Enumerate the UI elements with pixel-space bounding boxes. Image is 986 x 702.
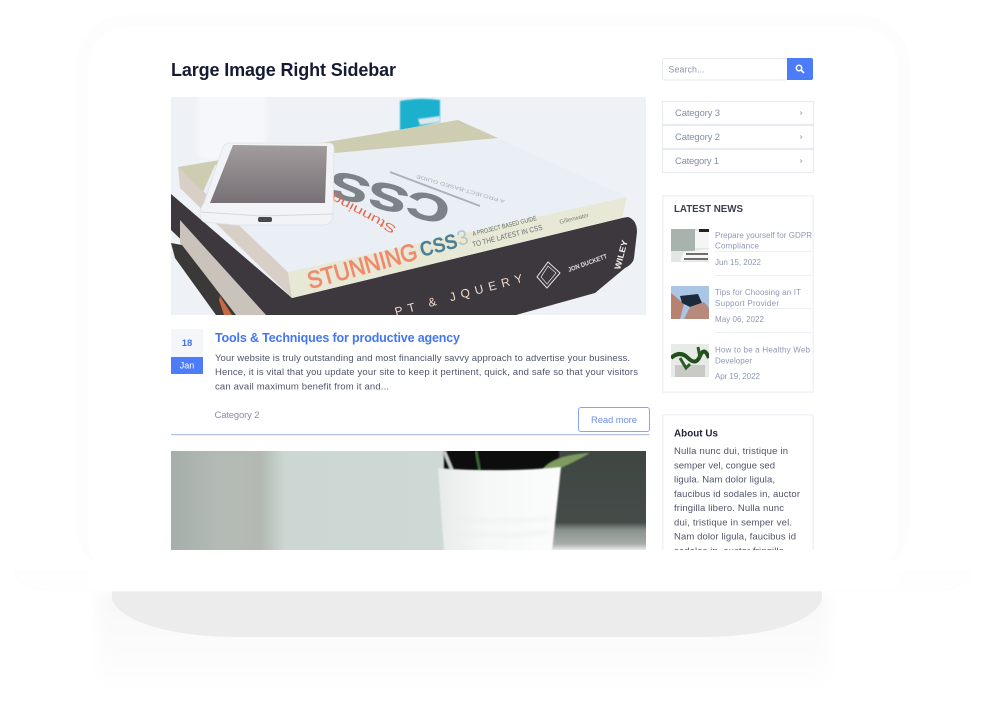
about text: Nam dolor ligula, faucibus id (674, 532, 796, 542)
cover lettering: CSS (326, 163, 454, 233)
hero photo: books and phone: TO THE LATEST IN CSS (471, 223, 543, 249)
search button (787, 58, 813, 80)
post meta: date badge: Jan (180, 360, 194, 370)
laptop frame (15, 15, 971, 591)
read more button: Read more (591, 415, 637, 426)
page title: Large Image Right Sidebar (171, 60, 396, 80)
dark book lettering: PT & JQUERY (393, 271, 524, 319)
panel: about us (662, 414, 814, 550)
news item 1: Prepare yourself for GDPR (715, 231, 812, 240)
hero photo: books and phone: A PROJECT BASED GUIDE (472, 215, 538, 238)
search box: Search... (668, 64, 704, 74)
news item 2: Tips for Choosing an IT (715, 288, 801, 297)
hero photo: books and phone: A PROJECT-BASED GUIDE (416, 173, 505, 203)
about text: dui, tristique in semper vel. (674, 518, 792, 528)
news item 3: How to be a Healthy Web (715, 346, 811, 354)
about text: faucibus id sodales in, auctor (674, 489, 800, 500)
second post photo: plant pot (171, 449, 646, 552)
post excerpt: can avail maximum benefit from it and... (215, 382, 389, 392)
news item 1 (671, 229, 813, 267)
hero photo: books and phone: 3 (454, 226, 471, 251)
post heading: Tools & Techniques for productive agency (215, 331, 460, 345)
about text (674, 446, 800, 557)
category list: Category 2 (675, 132, 720, 143)
news item 1: Jun 15, 2022 (715, 258, 762, 267)
read more button (578, 408, 650, 432)
post excerpt: Hence, it is vital that you update your site to keep it pertinent, quick, and safe so that your visitors (215, 367, 638, 378)
about text: semper vel, congue sed (674, 460, 775, 472)
post meta: date badge (171, 329, 203, 374)
post meta: date badge: 18 (182, 338, 192, 349)
post excerpt (215, 353, 638, 392)
panel: latest news: LATEST NEWS (674, 204, 743, 215)
panel: about us: About Us (674, 428, 719, 440)
post excerpt: Your website is truly outstanding and most financially savvy approach to advertise your business. (215, 353, 630, 364)
search box (662, 58, 813, 80)
about text: ligula. Nam dolor ligula, (674, 474, 775, 486)
upper book (178, 167, 292, 298)
lower dark book (171, 194, 637, 320)
news item 3 (671, 344, 811, 381)
panel: latest news (663, 196, 813, 392)
about text: fringilla libero. Nulla nunc (674, 503, 784, 514)
hero photo: books and phone: JON DUCKETT (567, 253, 608, 274)
about text: Nulla nunc dui, tristique in (674, 446, 788, 457)
hero photo: books and phone: WILEY (612, 239, 630, 271)
post category: Category 2 (214, 410, 260, 421)
news item 2: Support Provider (715, 299, 779, 308)
category list: Category 3 (675, 108, 720, 119)
laptop ground shadow (98, 590, 828, 698)
about text: sodales in, auctor fringilla (674, 546, 785, 557)
phone (200, 143, 334, 225)
hero photo: books and phone (171, 88, 646, 320)
spine lettering: STUNNING (304, 239, 420, 295)
news item 3: Apr 19, 2022 (715, 372, 761, 381)
news item 1: Compliance (715, 242, 760, 250)
news item 2 (671, 286, 813, 324)
hero photo: books and phone: Stunning (329, 190, 399, 236)
hero photo: books and phone: Gillenwater (559, 213, 590, 226)
news item 3: Developer (715, 356, 752, 366)
category list (662, 102, 814, 172)
hero photo: books and phone: CSS (417, 230, 460, 262)
category list: Category 1 (675, 156, 719, 167)
news item 2: May 06, 2022 (715, 315, 765, 324)
